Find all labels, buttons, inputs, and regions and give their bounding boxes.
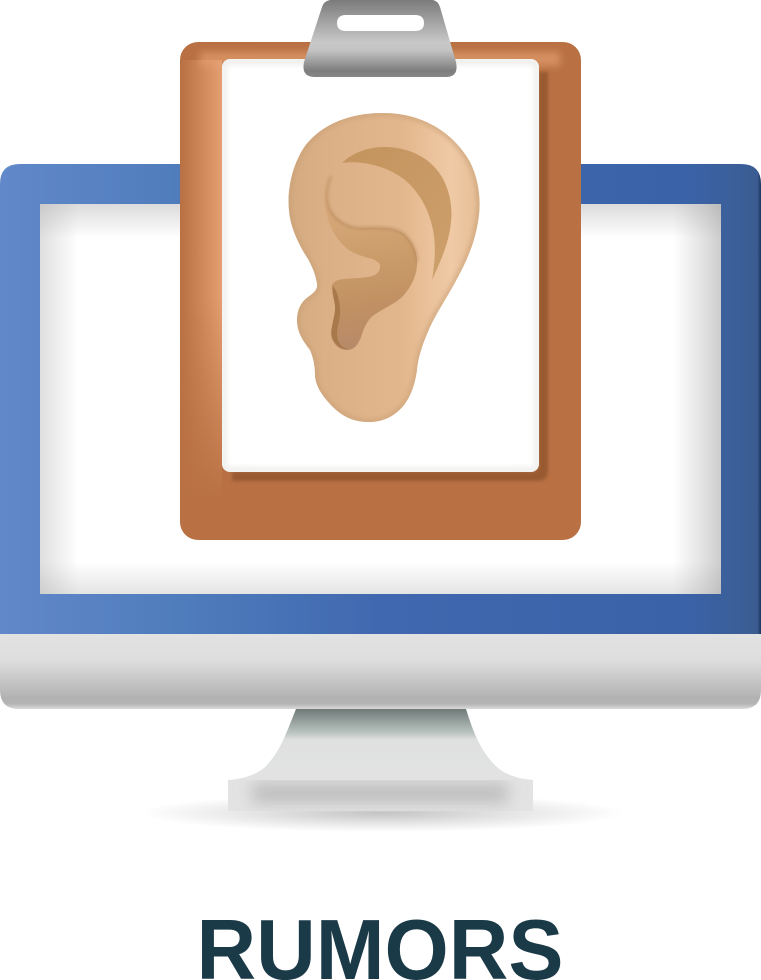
monitor blue frame <box>0 164 761 634</box>
monitor <box>0 164 761 832</box>
monitor stand neck <box>228 709 533 790</box>
ear helix fold <box>342 147 451 280</box>
ear fold shadow <box>327 176 417 262</box>
monitor screen <box>40 204 721 594</box>
ear concha fold <box>325 172 417 350</box>
clipboard clip <box>303 0 457 77</box>
clipboard board <box>180 42 581 540</box>
icon: ear <box>289 113 480 422</box>
ear outline <box>289 113 480 422</box>
ground shadow <box>140 794 624 832</box>
monitor chin <box>0 634 761 709</box>
paper shadow <box>232 72 548 481</box>
monitor stand base <box>228 780 533 811</box>
paper sheet <box>222 59 539 472</box>
ear canal <box>331 286 348 349</box>
clipboard <box>180 0 581 540</box>
